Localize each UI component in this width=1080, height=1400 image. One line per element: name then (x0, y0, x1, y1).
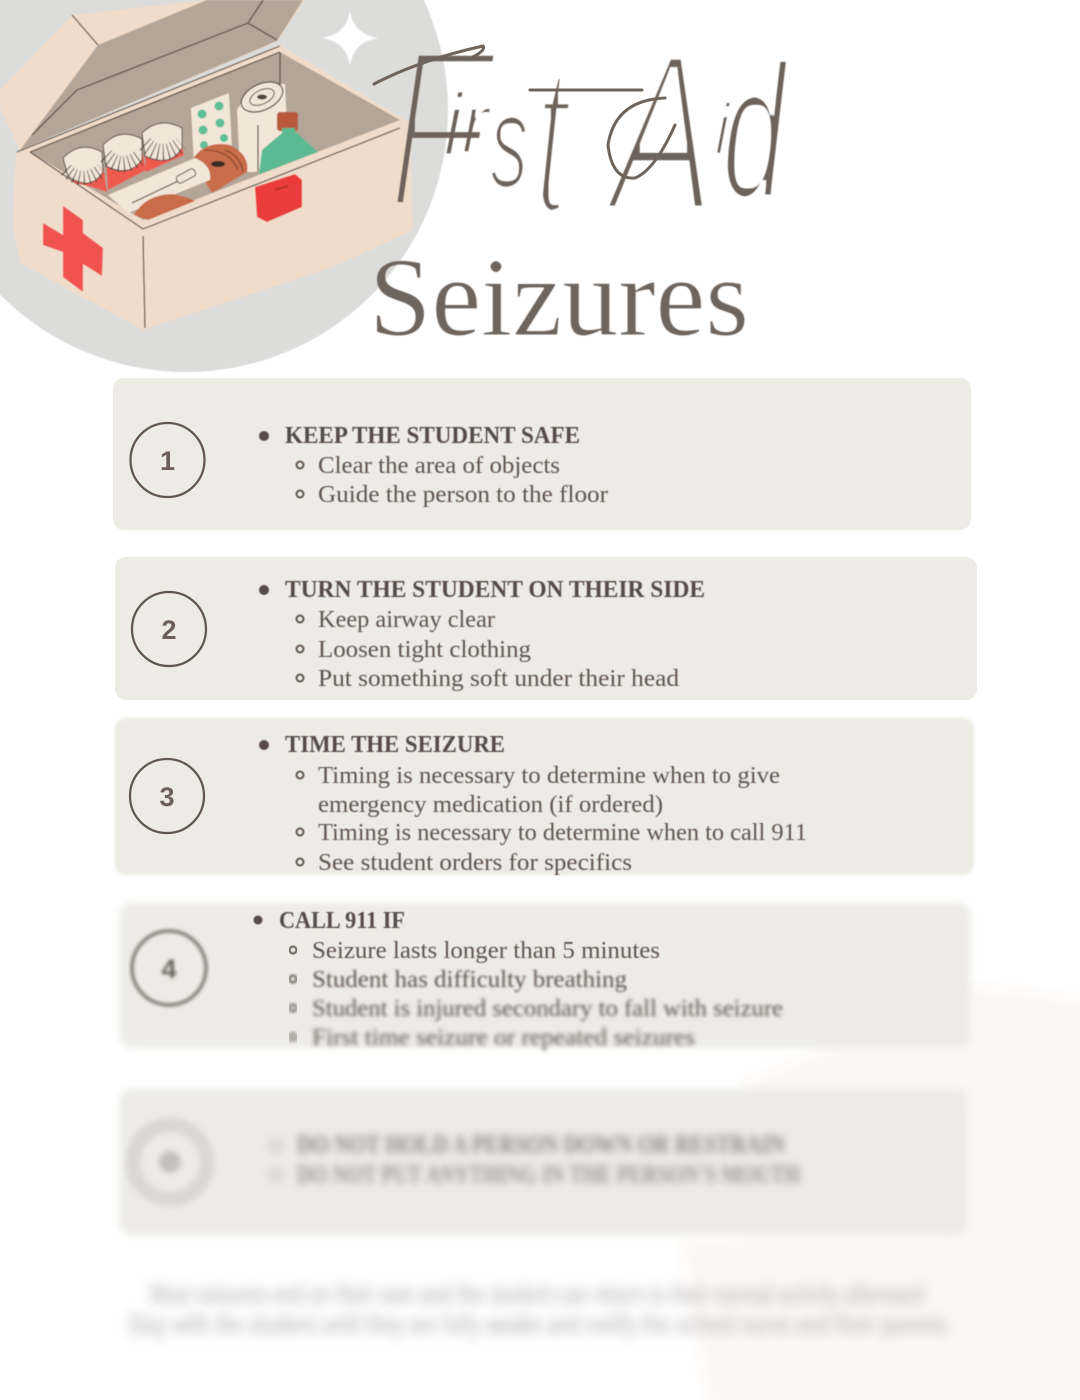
step 3 list: emergency medication (if ordered) (318, 792, 663, 818)
green bottle (259, 133, 318, 174)
blurred placeholder footer note (128, 1278, 948, 1341)
bandage roll (237, 84, 288, 172)
title: First Aid: i (443, 75, 465, 174)
red cross (43, 206, 103, 292)
pill bottles (66, 165, 107, 192)
step 1 list: Guide the person to the floor (318, 482, 608, 508)
number 4: 4 (161, 954, 177, 984)
title: First Aid: t (535, 18, 572, 259)
panel: step 3 (115, 718, 974, 876)
step 2 list: Keep airway clear (318, 607, 495, 633)
step 4 list (254, 908, 783, 1051)
step 3 list: See student orders for specifics (318, 850, 632, 876)
panel: step 4 (120, 903, 970, 1051)
blurred number badge (133, 1125, 207, 1199)
blurred placeholder list: DO NOT PUT ANYTHING IN THE PERSON'S MOUTH (297, 1160, 800, 1189)
step 3 list: Timing is necessary to determine when to give (318, 763, 780, 789)
step 3 list: Timing is necessary to determine when to call 911 (318, 820, 807, 846)
grey circle (0, 0, 448, 372)
step 4 list: Student is injured secondary to fall with seizure (312, 996, 783, 1022)
step 4 list: Student has difficulty breathing (312, 967, 627, 993)
title: First Aid: F (386, 1, 500, 258)
box lid (0, 0, 305, 150)
small red box (255, 174, 302, 222)
step 4 list: CALL 911 IF (279, 908, 405, 934)
title: First Aid: d (722, 26, 789, 238)
step 4 list: Seizure lasts longer than 5 minutes (312, 938, 660, 964)
box body (13, 45, 413, 330)
step 2 list: Loosen tight clothing (318, 637, 531, 663)
icon: first aid box on grey circle (0, 0, 448, 372)
panel: step 1 (113, 378, 971, 530)
number 1: 1 (160, 446, 175, 476)
step 4 list: First time seizure or repeated seizures (312, 1025, 695, 1051)
step 1 list (259, 423, 608, 508)
subtitle: Seizures: Seizures (369, 236, 749, 360)
step 2 list: Put something soft under their head (318, 666, 679, 692)
step 3 list (259, 732, 807, 876)
number 1 (130, 423, 204, 497)
title: First Aid: r (461, 77, 492, 171)
step 1 list: Clear the area of objects (318, 453, 560, 479)
step 2 list (259, 577, 705, 692)
syringe packet (108, 158, 210, 213)
title: First Aid: A (602, 7, 715, 259)
number 3: 3 (159, 782, 175, 812)
medical supplies (63, 76, 318, 222)
sparkle (322, 10, 378, 66)
number 2 (132, 592, 206, 666)
step 2 list: TURN THE STUDENT ON THEIR SIDE (285, 577, 705, 603)
step 1 list: KEEP THE STUDENT SAFE (285, 423, 580, 449)
title: First Aid: s (490, 67, 529, 215)
step 3 list: TIME THE SEIZURE (285, 732, 505, 758)
blurred placeholder list (267, 1130, 800, 1189)
background peach shapes (680, 985, 1080, 1400)
number 3 (130, 759, 204, 833)
blurred placeholder list: DO NOT HOLD A PERSON DOWN OR RESTRAIN (297, 1130, 785, 1159)
title: First Aid (374, 1, 789, 259)
panel: step 2 (115, 557, 977, 700)
title: First Aid: i (714, 90, 732, 170)
number 4 (132, 931, 206, 1005)
panel: blurred fifth step (120, 1089, 968, 1235)
orange pad (134, 194, 195, 220)
orange bandage (192, 144, 247, 193)
number 2: 2 (161, 615, 177, 645)
pill blister (191, 93, 232, 165)
